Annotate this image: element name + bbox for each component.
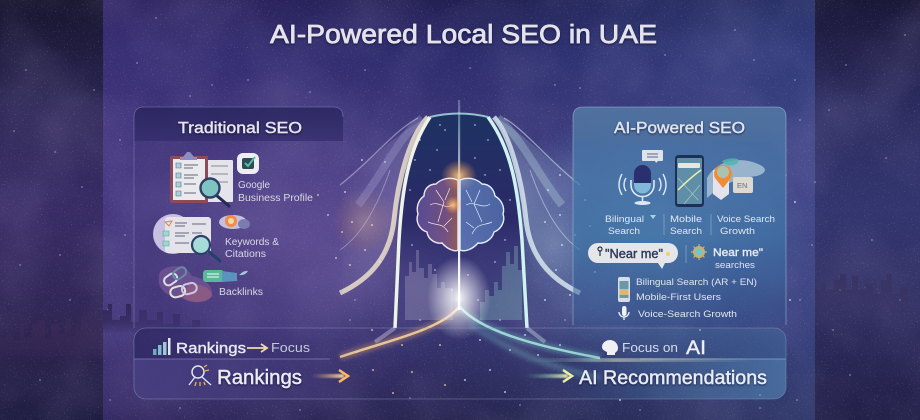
portal: inner skyline right (480, 246, 522, 320)
portal: right sweeping bands (460, 117, 600, 378)
label: Focus on AI (622, 338, 706, 359)
list: bilingual and mobile-first (636, 277, 757, 303)
panel: bottom comparison strip (134, 328, 786, 399)
heading: AI-Powered SEO: AI-Powered SEO (614, 120, 745, 137)
icon: bar chart (153, 338, 170, 355)
label: Voice Search Growth: Voice Search (717, 214, 775, 225)
label: Backlinks: Backlinks (219, 287, 263, 298)
label: Focus on AI: Focus on (622, 341, 678, 355)
label: Google Business Profile (238, 180, 313, 204)
panel: AI-powered SEO (573, 107, 786, 325)
portal: star dust (410, 125, 510, 320)
icon: keyword document with magnifier (153, 214, 220, 261)
label: Keywords & Citations: Keywords & (225, 237, 279, 248)
panel header band (573, 107, 786, 141)
list: bilingual and mobile-first: Bilingual Search (AR + EN) (636, 277, 757, 288)
portal: centre beam (458, 100, 460, 310)
background: left distant skyline (0, 318, 102, 352)
label: Rankings Focus: Focus (271, 341, 310, 355)
icon: backlink chains (159, 265, 212, 302)
portal: left sweeping bands (340, 117, 459, 357)
label: Bilingual Search (605, 214, 656, 237)
label: Keywords & Citations (225, 237, 279, 260)
heading: Traditional SEO: Traditional SEO (178, 120, 302, 137)
label: Google Business Profile: Google (238, 180, 270, 191)
glow line (525, 358, 755, 362)
label: AI Recommendations: AI Recommendations (579, 368, 767, 389)
icon: Google badge (237, 153, 259, 174)
portal: arch top glow (430, 114, 488, 117)
portal: arch interior (395, 114, 527, 330)
icon: glowing brain (417, 178, 504, 251)
label: Near me searches: Near me" (713, 247, 763, 259)
background: mid left skyline (103, 304, 200, 330)
title: AI-Powered Local SEO in UAE (270, 21, 657, 49)
panel: traditional SEO (134, 107, 343, 328)
portal: left fan (340, 117, 428, 293)
callout: Near me bubble: "Near me" (605, 247, 663, 261)
icon: lightbulb head (602, 340, 618, 355)
label: Bilingual Search: Search (608, 226, 640, 237)
panel background (134, 107, 343, 328)
label: Focus on AI: AI (686, 338, 706, 359)
portal: right fan (494, 117, 580, 293)
icon: smartphone map (675, 155, 704, 207)
panel header band (134, 107, 343, 141)
icon: speech bubble (642, 150, 663, 163)
icon: sun gear (691, 244, 707, 260)
label: Google Business Profile: Business Profile (238, 193, 313, 204)
label: Mobile Search: Search (670, 226, 702, 237)
label: Rankings Focus (176, 340, 310, 357)
icon: location pin with EN tag and cloud (707, 158, 765, 200)
icon: citation pin pill (219, 215, 250, 229)
callout: Near me bubble (588, 243, 678, 269)
icon: small phone (618, 277, 630, 302)
label: Near me searches: searches (715, 260, 755, 271)
background: right distant skyline (816, 274, 908, 305)
list: bilingual and mobile-first: Mobile-First Users (636, 292, 721, 303)
label: Bilingual Search: Bilingual (605, 214, 644, 225)
label: Near me searches (713, 247, 763, 271)
label: Rankings: Rankings (217, 367, 302, 389)
arrow: rankings orange (312, 370, 348, 382)
list: voice search growth: Voice-Search Growth (638, 309, 737, 320)
icon: location pin with EN tag and cloud: EN (737, 181, 747, 190)
icon: small microphone (619, 306, 629, 320)
label: Mobile Search (670, 214, 702, 237)
strip background (134, 328, 786, 399)
icon: clipboard checklist with magnifier (170, 152, 233, 206)
label: Rankings Focus: Rankings (176, 340, 246, 357)
label: Mobile Search: Mobile (670, 214, 702, 225)
arrow: AI recommendations green (525, 370, 572, 382)
icon: search rays (189, 365, 211, 386)
label: Keywords & Citations: Citations (225, 249, 266, 260)
central portal (340, 100, 600, 378)
portal: inner skyline left (405, 250, 453, 320)
icon: link tag (203, 270, 248, 282)
panel background (573, 107, 786, 325)
label: Voice Search Growth: Growth (720, 226, 755, 237)
icon: microphone (619, 165, 666, 205)
label: Voice Search Growth (717, 214, 775, 237)
